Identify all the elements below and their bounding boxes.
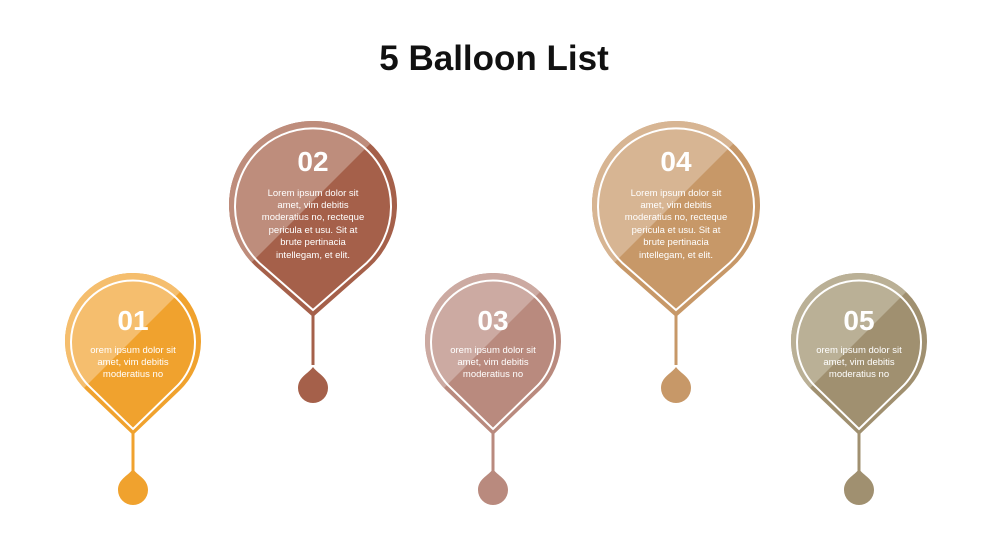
balloon 02: moderatius no, recteque	[262, 212, 364, 223]
balloon 02	[229, 121, 397, 403]
balloon 01: amet, vim debitis	[97, 357, 169, 368]
balloon 01: 01	[117, 305, 149, 336]
balloon 03: moderatius no	[463, 369, 523, 380]
balloon 05: moderatius no	[829, 369, 889, 380]
balloon 02: brute pertinacia	[280, 237, 346, 248]
balloon 02: amet, vim debitis	[277, 200, 349, 211]
balloon 01: moderatius no	[103, 369, 163, 380]
balloon 05: amet, vim debitis	[823, 357, 895, 368]
balloon 02: Lorem ipsum dolor sit	[268, 188, 359, 199]
balloon 04: brute pertinacia	[643, 237, 709, 248]
balloon 05	[791, 273, 927, 505]
balloon 02: intellegam, et elit.	[276, 250, 350, 261]
balloon 04: pericula et usu. Sit at	[632, 225, 721, 236]
balloon 04	[592, 121, 760, 403]
balloon 04: 04	[660, 146, 692, 177]
balloon 01: orem ipsum dolor sit	[90, 345, 176, 356]
balloon 02: 02	[297, 146, 329, 177]
balloon 02: pericula et usu. Sit at	[269, 225, 358, 236]
balloon 03: 03	[477, 305, 509, 336]
balloon 03	[425, 273, 561, 505]
balloon 04: intellegam, et elit.	[639, 250, 713, 261]
balloon 04: amet, vim debitis	[640, 200, 712, 211]
balloon 05: 05	[843, 305, 875, 336]
balloon 03: orem ipsum dolor sit	[450, 345, 536, 356]
title: 5 Balloon List	[379, 39, 609, 78]
balloon 04: Lorem ipsum dolor sit	[631, 188, 722, 199]
balloon 05: orem ipsum dolor sit	[816, 345, 902, 356]
balloon 04: moderatius no, recteque	[625, 212, 727, 223]
balloon 01	[65, 273, 201, 505]
balloon 03: amet, vim debitis	[457, 357, 529, 368]
